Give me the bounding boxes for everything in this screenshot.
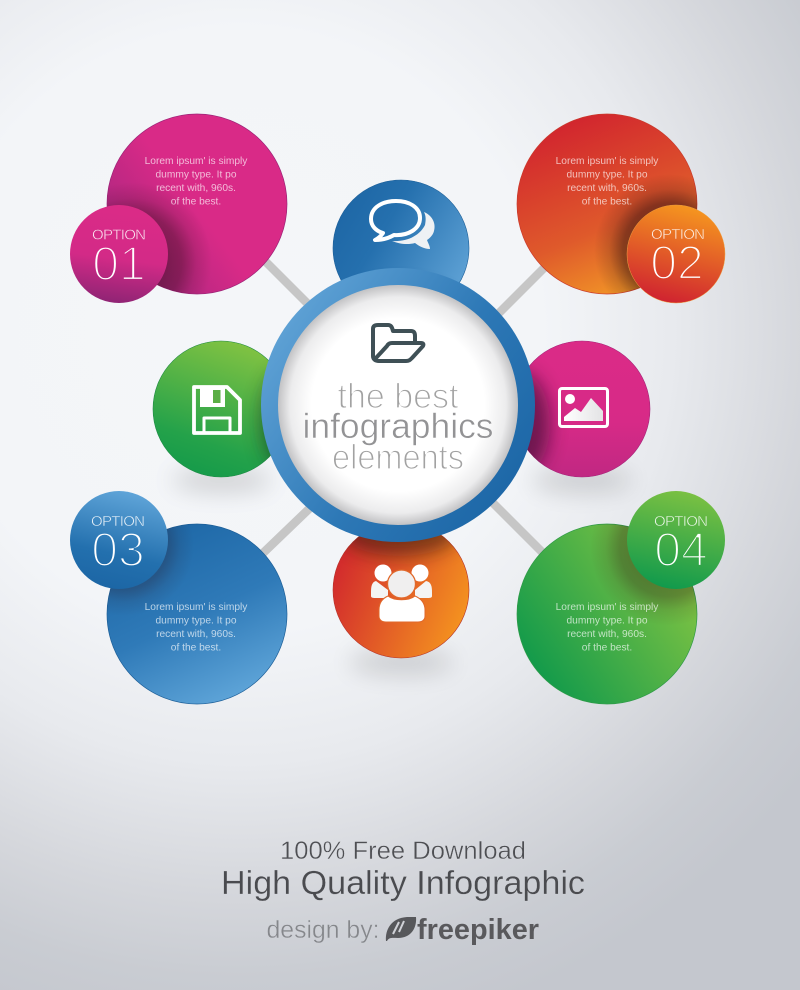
large circle 02 — [517, 114, 697, 294]
body text 01: dummy type. It po — [156, 170, 237, 180]
badge 03: 03 — [91, 524, 145, 577]
hub title: infographics — [302, 407, 494, 446]
badge 01: 01 — [92, 238, 146, 291]
panel: option 02 — [516, 114, 726, 304]
credit line: freepiker — [417, 914, 539, 946]
large circle 03 — [107, 524, 287, 704]
icon: floppy disk — [194, 387, 240, 433]
body text 04: of the best. — [582, 642, 632, 654]
body text 03: dummy type. It po — [156, 616, 237, 626]
credit line: design by: — [266, 916, 380, 944]
icon: speech bubbles — [371, 201, 435, 249]
body text 04: dummy type. It po — [567, 616, 648, 626]
footer heading: High Quality Infographic — [221, 864, 585, 901]
badge 03: OPTION — [91, 513, 145, 530]
icon: picture — [560, 388, 608, 426]
badge 04: OPTION — [654, 513, 708, 530]
body text 02: recent with, 960s. — [567, 183, 647, 194]
body text 01: Lorem ipsum' is simply — [145, 156, 248, 167]
connector lines — [260, 258, 547, 556]
hub title — [302, 377, 494, 477]
icon: freepiker leaf — [386, 917, 416, 941]
body text 03: of the best. — [171, 642, 221, 654]
panel: option 01 — [70, 114, 288, 303]
hub title: elements — [332, 438, 464, 477]
badge 02 — [627, 205, 725, 303]
badge 01: OPTION — [92, 226, 146, 244]
footer heading: 100% Free Download — [280, 837, 526, 865]
large circle 04 — [517, 524, 697, 704]
badge 02: OPTION — [651, 226, 705, 243]
panel: option 04 — [516, 491, 725, 704]
central hub — [261, 268, 535, 542]
body text 03: Lorem ipsum' is simply — [145, 602, 248, 613]
large circle 01 — [107, 114, 287, 294]
icon circle: picture — [528, 340, 650, 500]
icon: people — [371, 564, 432, 622]
body text 01: of the best. — [171, 196, 221, 208]
icon: folder — [373, 325, 423, 361]
hub title: the best — [338, 377, 459, 416]
credit line — [266, 914, 539, 946]
badge 03 — [70, 491, 168, 589]
badge 04: 04 — [654, 524, 708, 577]
panel: option 03 — [70, 491, 288, 704]
icon circle: speech bubbles — [332, 180, 470, 283]
badge 04 — [627, 491, 725, 589]
badge 02: 02 — [650, 237, 704, 290]
body text 02: of the best. — [582, 196, 632, 208]
badge 01 — [70, 205, 168, 303]
body text 04: Lorem ipsum' is simply — [556, 602, 659, 613]
icon circle: people — [332, 535, 470, 682]
body text 01: recent with, 960s. — [156, 183, 236, 194]
icon circle: floppy disk — [152, 340, 271, 500]
body text 03: recent with, 960s. — [156, 629, 236, 640]
body text 02: dummy type. It po — [567, 170, 648, 180]
body text 04: recent with, 960s. — [567, 629, 647, 640]
body text 02: Lorem ipsum' is simply — [556, 156, 659, 167]
footer heading — [221, 837, 585, 901]
